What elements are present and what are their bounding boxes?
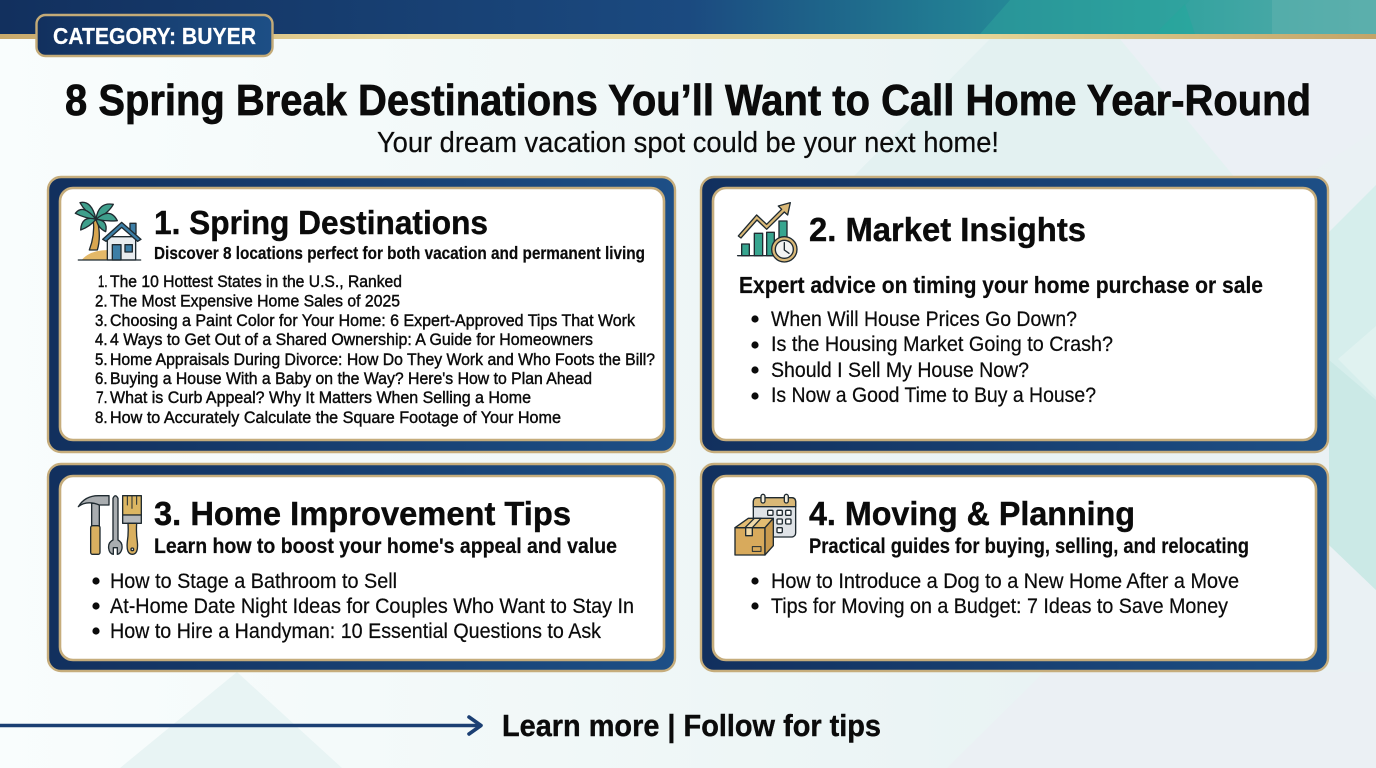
heading: 1. Spring Destinations	[154, 204, 488, 241]
numbered list: 3.	[95, 312, 108, 330]
panel: market insights	[701, 177, 1328, 452]
bullet list: How to Introduce a Dog to a New Home After a Move	[771, 570, 1239, 593]
heading: 2. Market Insights	[809, 211, 1086, 248]
sub-heading: Learn how to boost your home's appeal and value	[154, 535, 617, 558]
numbered list: 2.	[95, 292, 108, 310]
numbered list: 8.	[95, 409, 108, 427]
numbered list: What is Curb Appeal? Why It Matters When Selling a Home	[110, 389, 531, 407]
sub-heading: Discover 8 locations perfect for both vacation and permanent living	[154, 243, 645, 263]
numbered list: 1.	[98, 273, 108, 291]
numbered list: Buying a House With a Baby on the Way? Here's How to Plan Ahead	[110, 370, 592, 388]
bullet list	[751, 570, 1239, 618]
icon: hammer wrench and brush	[78, 496, 141, 554]
call to action: Learn more | Follow for tips	[502, 708, 881, 743]
category badge: CATEGORY: BUYER	[53, 23, 256, 49]
numbered list: The 10 Hottest States in the U.S., Ranked	[110, 273, 402, 291]
heading: 4. Moving & Planning	[809, 495, 1135, 532]
panel: moving and planning	[701, 464, 1328, 671]
category badge	[36, 15, 272, 56]
numbered list: 6.	[95, 370, 108, 388]
sub-heading: Expert advice on timing your home purchase or sale	[739, 272, 1263, 298]
subtitle: Your dream vacation spot could be your next home!	[377, 127, 999, 159]
bullet list: Tips for Moving on a Budget: 7 Ideas to Save Money	[771, 595, 1228, 618]
numbered list: 5.	[95, 351, 108, 369]
bullet list: Is Now a Good Time to Buy a House?	[771, 384, 1096, 407]
bullet list: At-Home Date Night Ideas for Couples Who Want to Stay In	[110, 595, 634, 618]
bullet list: How to Hire a Handyman: 10 Essential Questions to Ask	[110, 620, 601, 643]
numbered list	[95, 273, 655, 427]
numbered list: 7.	[96, 389, 108, 407]
panel: spring destinations	[48, 177, 675, 452]
numbered list: How to Accurately Calculate the Square Footage of Your Home	[110, 409, 561, 427]
numbered list: 4.	[95, 331, 108, 349]
numbered list: 4 Ways to Get Out of a Shared Ownership: A Guide for Homeowners	[110, 331, 593, 349]
icon: calendar and moving box	[735, 494, 796, 555]
bullet list: When Will House Prices Go Down?	[771, 308, 1077, 331]
bullet list	[92, 570, 634, 643]
top header band	[0, 0, 1376, 39]
sub-heading: Practical guides for buying, selling, and relocating	[809, 535, 1249, 558]
numbered list: Choosing a Paint Color for Your Home: 6 Expert-Approved Tips That Work	[110, 312, 636, 330]
bullet list: How to Stage a Bathroom to Sell	[110, 570, 397, 593]
bullet list: Is the Housing Market Going to Crash?	[771, 333, 1113, 356]
icon: palm tree and house	[75, 202, 141, 260]
heading: 3. Home Improvement Tips	[154, 495, 571, 532]
icon: rising chart and clock	[738, 203, 797, 262]
panel: home improvement tips	[48, 464, 675, 671]
bullet list	[751, 308, 1113, 407]
numbered list: The Most Expensive Home Sales of 2025	[110, 292, 400, 310]
bullet list: Should I Sell My House Now?	[771, 359, 1029, 382]
numbered list: Home Appraisals During Divorce: How Do They Work and Who Foots the Bill?	[110, 351, 655, 369]
arrow	[0, 717, 481, 734]
